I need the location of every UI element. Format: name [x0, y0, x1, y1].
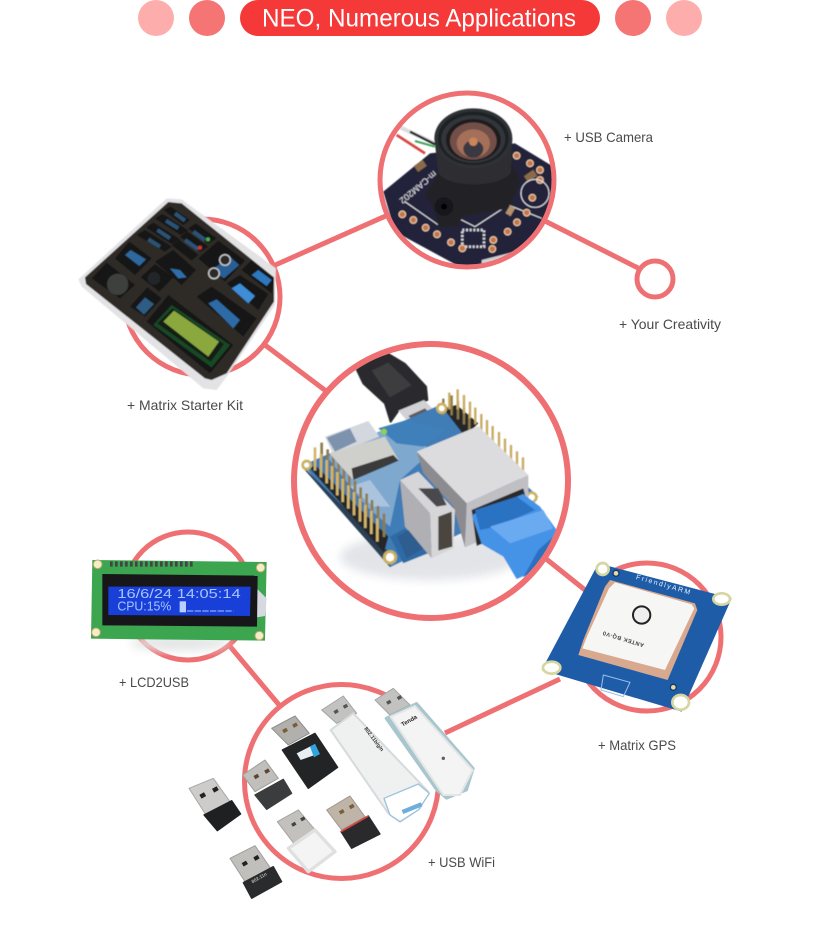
- connector lines: [228, 215, 638, 733]
- title pill: [240, 0, 600, 36]
- LCD readout: 16/6/24 14:05:14: [117, 587, 241, 601]
- infographic canvas: [78, 0, 732, 899]
- header dot far right: [666, 0, 702, 36]
- ceramic antenna: [578, 580, 697, 680]
- bottom dongle: 802.11n: [251, 871, 268, 884]
- node ring: LCD2USB: [124, 532, 252, 660]
- board silkscreen: FriendlyARM: [635, 574, 691, 596]
- LCD bezel: [102, 574, 258, 627]
- title: NEO, Numerous Applications: [262, 4, 576, 32]
- label: Matrix GPS: + Matrix GPS: [598, 737, 676, 753]
- GPS circuit board: [542, 563, 732, 712]
- product: Matrix starter kit tray: [78, 198, 276, 390]
- kit modules: [125, 213, 272, 328]
- header banner: [138, 0, 702, 36]
- product: Matrix GPS module: [542, 563, 732, 712]
- joystick knob: [107, 274, 128, 295]
- header dot far left: [138, 0, 174, 36]
- label: USB WiFi: + USB WiFi: [428, 854, 495, 870]
- LCD circuit board: [91, 560, 267, 641]
- node ring: Matrix GPS: [573, 563, 721, 711]
- black square dongle: [272, 716, 338, 788]
- Tenda dongle: Tenda: [401, 714, 419, 728]
- bottom dongle: [230, 846, 282, 898]
- white 802.11 dongle: 802.11b/g/n: [362, 726, 384, 753]
- product: USB WiFi dongles: [189, 688, 473, 898]
- antenna marking: ANTEK BQ-V0: [602, 629, 645, 647]
- tray shell: [78, 198, 276, 390]
- LCD readout: CPU:15%: [117, 600, 171, 614]
- label: LCD2USB: + LCD2USB: [119, 674, 189, 690]
- product: USB camera: m-CAM202: [398, 169, 439, 206]
- product: NEO board in central circle: [300, 353, 556, 583]
- white 802.11 dongle: [322, 696, 429, 822]
- Tenda dongle: [375, 688, 473, 798]
- LCD blue screen: [108, 587, 251, 616]
- label: USB Camera: + USB Camera: [564, 129, 653, 145]
- central circle ring: [294, 344, 568, 618]
- tray foam: [85, 202, 274, 380]
- far left dongle: [189, 778, 241, 831]
- node ring: USB WiFi: [244, 684, 438, 878]
- red band dongle: [327, 796, 380, 848]
- label: Matrix Starter Kit: + Matrix Starter Kit: [127, 397, 243, 413]
- header dot right: [615, 0, 651, 36]
- product: USB camera: [383, 108, 552, 264]
- product: LCD2USB display: [91, 560, 267, 651]
- camera circle ring: [380, 93, 554, 267]
- node ring: your creativity: [637, 261, 673, 297]
- white nano dongle: [277, 810, 335, 872]
- header dot left: [189, 0, 225, 36]
- label: Your Creativity: + Your Creativity: [619, 316, 721, 332]
- kit LCD module: [153, 305, 230, 367]
- LCD readout: [117, 587, 241, 614]
- small dongle inside ring left: [243, 760, 292, 809]
- node ring: starter kit: [124, 219, 280, 375]
